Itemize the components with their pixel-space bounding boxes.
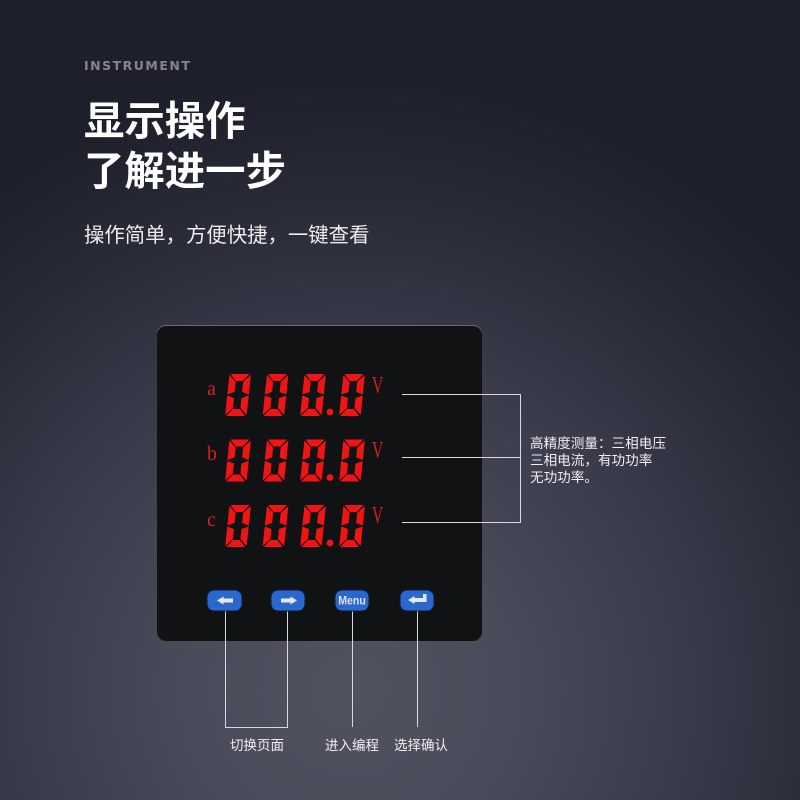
button: menu: Menu	[338, 595, 366, 608]
button: menu	[335, 590, 369, 611]
label: select confirm: 选择确认	[394, 738, 448, 753]
title: 了解进一步	[84, 148, 286, 194]
display row a	[207, 373, 384, 416]
display row c: V	[372, 503, 384, 529]
display row b	[207, 438, 384, 482]
leader lines: buttons to labels	[226, 610, 418, 728]
display row c: c	[207, 509, 216, 531]
callout: measurement description: 无功功率。	[530, 470, 598, 485]
button: left arrow	[207, 590, 242, 611]
title: 显示操作	[84, 98, 246, 144]
title	[84, 98, 286, 194]
label: enter programming: 进入编程	[325, 738, 379, 753]
callout: measurement description	[530, 436, 666, 485]
subtitle: 操作简单，方便快捷，一键查看	[84, 225, 369, 247]
panel: meter face	[157, 325, 482, 641]
callout: measurement description: 三相电流，有功功率	[530, 453, 652, 468]
display row b: b	[207, 443, 217, 465]
label: switch page: 切换页面	[230, 738, 284, 753]
button: enter	[400, 590, 434, 611]
display row a: a	[207, 378, 216, 400]
button: right arrow	[271, 590, 305, 611]
display row c	[207, 503, 384, 547]
brand label: INSTRUMENT	[84, 58, 191, 73]
leader lines: display rows to callout	[402, 394, 520, 522]
callout: measurement description: 高精度测量：三相电压	[530, 436, 666, 451]
display row a: V	[372, 373, 384, 399]
display row b: V	[372, 438, 384, 464]
